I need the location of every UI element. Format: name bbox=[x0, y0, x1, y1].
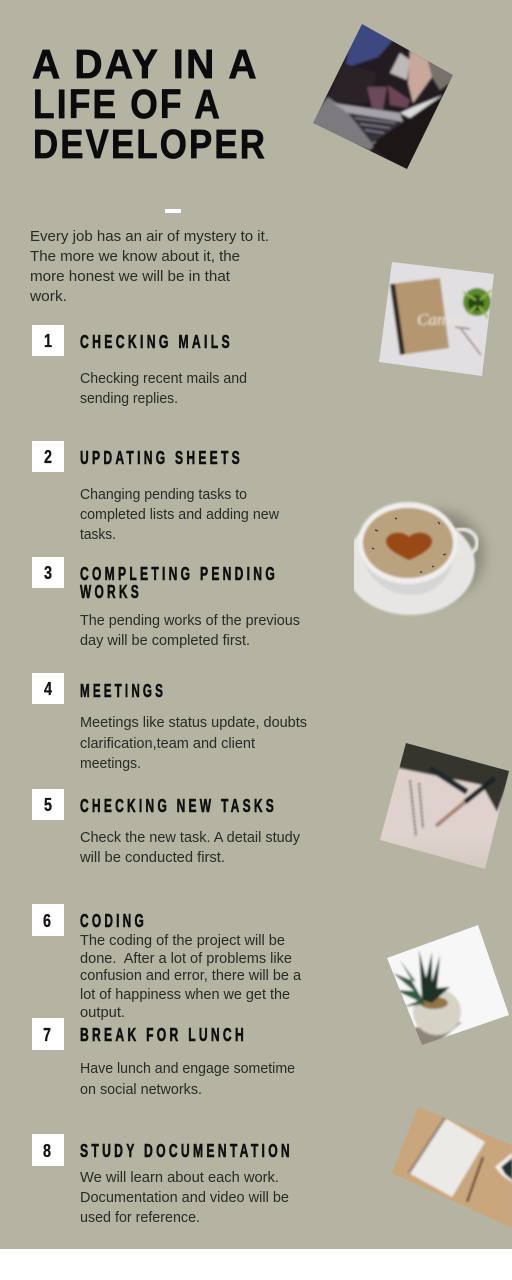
intro text: more honest we will be in that bbox=[30, 269, 230, 285]
description: output. bbox=[80, 1005, 125, 1021]
photo: notebook and plant: Canva bbox=[417, 310, 461, 329]
description bbox=[80, 1170, 289, 1226]
title: LIFE OF A bbox=[33, 81, 222, 127]
heading: study documentation: STUDY DOCUMENTATION bbox=[80, 1140, 293, 1161]
description: The pending works of the previous bbox=[80, 613, 300, 629]
heading: meetings: MEETINGS bbox=[80, 680, 166, 701]
number badge 1: 1 bbox=[44, 331, 52, 351]
photo: fountain pen on paper bbox=[380, 743, 509, 869]
title bbox=[32, 41, 267, 167]
description: lot of happiness when we get the bbox=[80, 987, 290, 1003]
description: day will be completed first. bbox=[80, 633, 250, 649]
description bbox=[80, 613, 300, 649]
description bbox=[80, 371, 247, 407]
description: Checking recent mails and bbox=[80, 371, 247, 387]
description: completed lists and adding new bbox=[80, 507, 280, 523]
number badge 6: 6 bbox=[43, 911, 51, 931]
heading: completing pending works: COMPLETING PENDING bbox=[80, 563, 278, 584]
photo: potted plant on white bbox=[387, 925, 509, 1045]
photo: notebook and plant bbox=[379, 262, 494, 376]
intro text bbox=[29, 229, 269, 305]
description: Have lunch and engage sometime bbox=[80, 1061, 295, 1077]
description bbox=[79, 830, 301, 866]
number badge 8: 8 bbox=[43, 1141, 51, 1161]
intro text: work. bbox=[29, 289, 67, 305]
number badge 5 bbox=[32, 789, 64, 820]
description bbox=[80, 933, 302, 1021]
number badge 5: 5 bbox=[44, 795, 52, 815]
description: tasks. bbox=[80, 527, 116, 543]
number badge 8 bbox=[32, 1134, 64, 1166]
title: DEVELOPER bbox=[33, 121, 267, 167]
number badge 1 bbox=[32, 325, 64, 356]
description: done. After a lot of problems like bbox=[80, 951, 292, 967]
description: The coding of the project will be bbox=[80, 933, 285, 949]
description: Documentation and video will be bbox=[80, 1190, 289, 1206]
heading: completing pending works: WORKS bbox=[80, 581, 142, 602]
heading: checking new tasks: CHECKING NEW TASKS bbox=[80, 795, 277, 816]
photo: hands typing on laptop bbox=[313, 24, 453, 169]
heading: checking mails: CHECKING MAILS bbox=[80, 331, 233, 352]
number badge 2 bbox=[32, 441, 64, 472]
intro text: Every job has an air of mystery to it. bbox=[30, 229, 269, 245]
step 4 bbox=[32, 673, 307, 772]
description: Changing pending tasks to bbox=[80, 487, 247, 503]
step 3 bbox=[32, 557, 300, 649]
number badge 4 bbox=[32, 673, 64, 704]
description: used for reference. bbox=[80, 1210, 200, 1226]
heading: break for lunch: BREAK FOR LUNCH bbox=[80, 1024, 247, 1045]
heading: completing pending works bbox=[80, 563, 278, 602]
step 8 bbox=[32, 1134, 293, 1226]
description: Meetings like status update, doubts bbox=[80, 715, 307, 731]
step 6 bbox=[32, 904, 302, 1021]
photo: coffee cup on saucer bbox=[345, 502, 484, 615]
description: meetings. bbox=[80, 756, 141, 772]
number badge 4: 4 bbox=[44, 679, 52, 699]
title: A DAY IN A bbox=[32, 41, 259, 87]
number badge 3: 3 bbox=[44, 563, 52, 583]
description: confusion and error, there will be a bbox=[80, 968, 302, 984]
number badge 2: 2 bbox=[44, 447, 52, 467]
number badge 7: 7 bbox=[43, 1025, 51, 1045]
step 7 bbox=[32, 1018, 295, 1098]
intro text: The more we know about it, the bbox=[30, 249, 240, 265]
photo: spiral notebook on desk bbox=[388, 1100, 512, 1230]
description bbox=[80, 487, 280, 543]
step 2 bbox=[32, 441, 280, 543]
number badge 3 bbox=[32, 557, 64, 588]
description: will be conducted first. bbox=[79, 850, 225, 866]
description: clarification,team and client bbox=[80, 736, 255, 752]
step 5 bbox=[32, 789, 301, 866]
heading: updating sheets: UPDATING SHEETS bbox=[80, 447, 243, 468]
description: Check the new task. A detail study bbox=[80, 830, 301, 846]
number badge 6 bbox=[32, 904, 64, 936]
heading: coding: CODING bbox=[80, 910, 147, 931]
description bbox=[80, 1061, 295, 1098]
description bbox=[80, 715, 307, 772]
description: on social networks. bbox=[80, 1082, 202, 1098]
white dash accent bbox=[165, 209, 181, 213]
number badge 7 bbox=[32, 1018, 64, 1050]
description: We will learn about each work. bbox=[80, 1170, 279, 1186]
description: sending replies. bbox=[80, 391, 178, 407]
step 1 bbox=[32, 325, 247, 407]
